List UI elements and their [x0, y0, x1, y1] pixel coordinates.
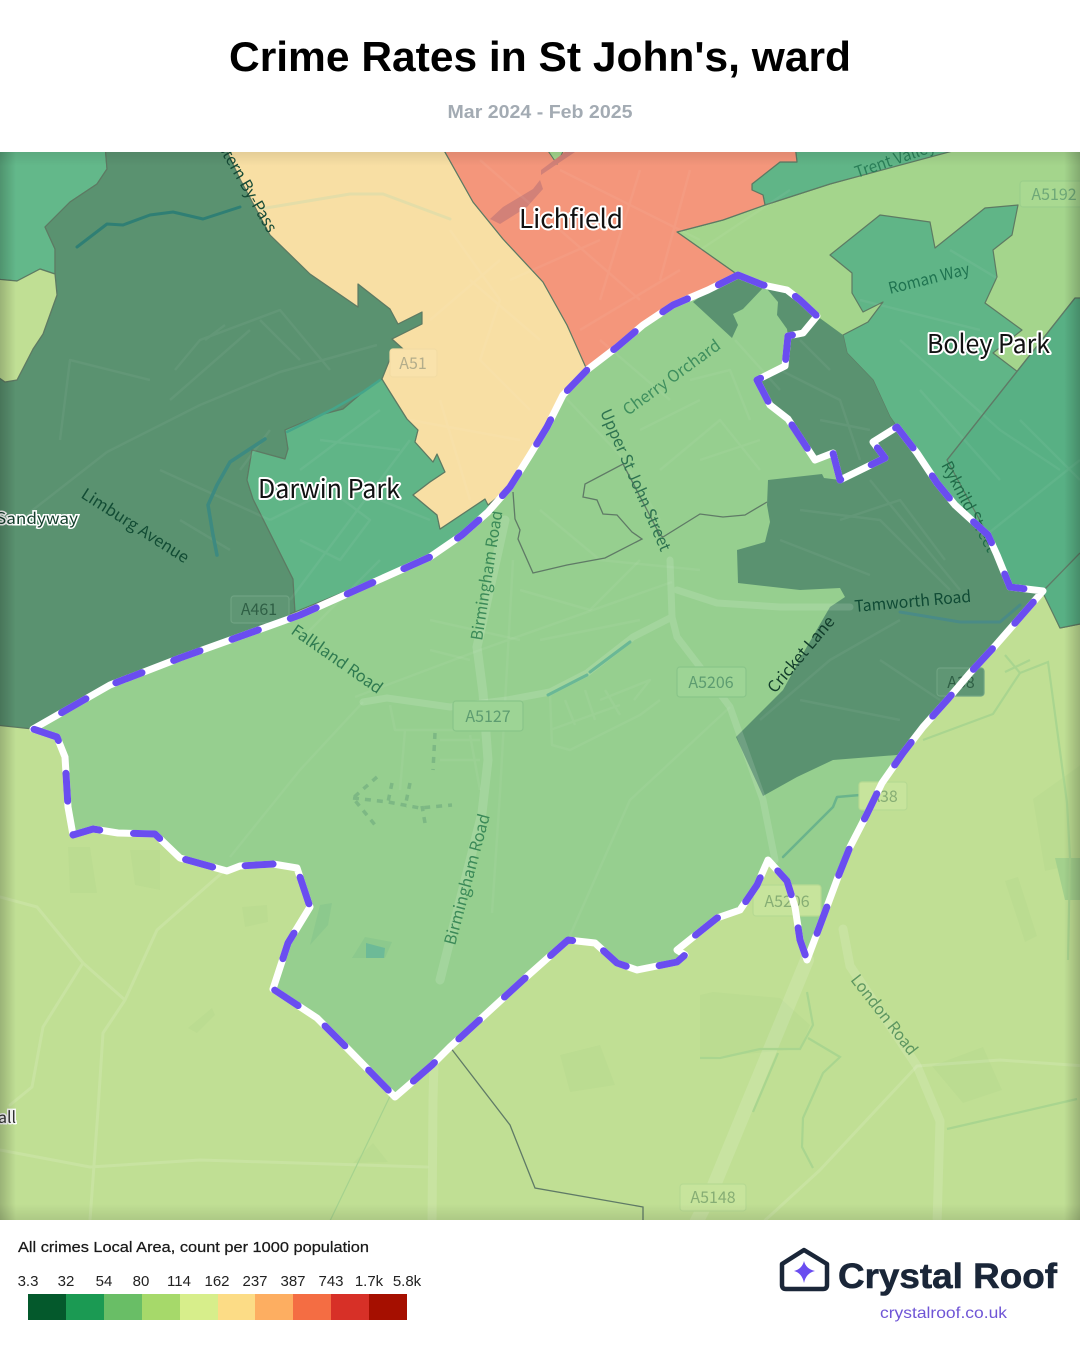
road labels: Ryknild Street	[937, 456, 1005, 556]
region: left dark green	[0, 145, 422, 729]
legend colour scale	[28, 1294, 407, 1320]
road labels: Birmingham Road	[437, 811, 495, 947]
region: left pale patch	[0, 268, 54, 280]
legend tick labels: 162	[204, 1273, 230, 1290]
lake in Lichfield	[490, 152, 575, 224]
road labels: Tamworth Road	[853, 583, 972, 617]
road shields: A38	[947, 669, 975, 693]
road labels: Upper St John Street	[595, 404, 678, 554]
footpaths in ward	[353, 733, 452, 825]
legend tick labels: 1.7k	[355, 1273, 384, 1290]
legend tick labels: 114	[167, 1273, 191, 1290]
region: Roman Way and Boley Park	[830, 205, 1080, 628]
road labels: Western By-Pass	[203, 118, 284, 236]
rural roads and streams	[0, 655, 1080, 1225]
road shields: A5127	[465, 703, 511, 727]
internal ward boundaries	[450, 298, 1080, 1220]
region: small green notch at north edge	[548, 152, 564, 165]
road labels: Roman Way	[885, 255, 972, 299]
icon: house with star	[782, 1250, 827, 1289]
road shields	[231, 181, 1080, 1211]
legend tick labels: 32	[58, 1273, 74, 1290]
region: dark sub-area east of ward	[736, 289, 1043, 796]
road labels: Cricket Lane	[760, 610, 839, 697]
road labels: Birmingham Road	[463, 509, 507, 642]
road labels	[0, 118, 1005, 1128]
regions with thin borders	[0, 145, 1080, 729]
legend tick labels: 54	[96, 1273, 112, 1290]
region: north-east light green	[678, 152, 1080, 370]
region: top-left teal corner	[0, 145, 107, 281]
road shields: A51	[399, 350, 427, 374]
legend tick labels: 5.8k	[393, 1273, 422, 1290]
legend heading: All crimes Local Area, count per 1000 population	[18, 1239, 369, 1256]
logo: Crystal Roof	[782, 1250, 1057, 1322]
road shields: A5192	[1031, 181, 1077, 205]
map edge fade	[0, 152, 1080, 1220]
legend	[18, 1239, 422, 1320]
road shields: A5206	[688, 669, 734, 693]
rivers	[77, 194, 1020, 857]
road labels: Falkland Road	[287, 617, 389, 698]
title: Crime Rates in St John's, ward	[229, 33, 851, 80]
region: far north teal strip	[752, 152, 951, 206]
rural field patches	[1055, 858, 1080, 900]
region: east teal block	[947, 298, 1080, 628]
place label: Darwin Park: Darwin Park	[258, 469, 401, 506]
ward boundary: white dashed purple outline	[33, 275, 1043, 1097]
road labels: Cherry Orchard	[617, 332, 725, 420]
website link: crystalroof.co.uk	[880, 1305, 1008, 1322]
road labels: Limburg Avenue	[77, 481, 195, 568]
road labels: Trent Valley	[851, 132, 939, 183]
road shields: A5148	[690, 1184, 736, 1208]
ward ponds	[310, 903, 392, 958]
legend tick labels: 743	[318, 1273, 344, 1290]
region: St John's ward light green	[42, 288, 897, 1092]
place label: Boley Park: Boley Park	[927, 324, 1051, 361]
region: city pale yellow	[224, 145, 587, 529]
road shields: A461	[241, 596, 277, 620]
road shields: A38	[870, 783, 898, 807]
region: dark sub-area north of ward	[693, 278, 763, 338]
place label: Lichfield: Lichfield	[519, 199, 623, 236]
subtitle: date range: Mar 2024 - Feb 2025	[448, 102, 632, 122]
map base: rural light green area	[0, 503, 1080, 1220]
logo wordmark: Crystal Roof	[838, 1257, 1057, 1296]
legend tick labels	[18, 1273, 422, 1290]
road shields: A5206	[764, 888, 810, 912]
legend tick labels: 3.3	[18, 1273, 38, 1290]
legend tick labels: 387	[280, 1273, 306, 1290]
road labels: London Road	[846, 968, 925, 1060]
legend tick labels: 237	[242, 1273, 268, 1290]
legend tick labels: 80	[133, 1273, 149, 1290]
region: Darwin Park teal	[247, 379, 495, 612]
roads network	[270, 516, 854, 984]
region: Lichfield salmon	[441, 145, 797, 370]
